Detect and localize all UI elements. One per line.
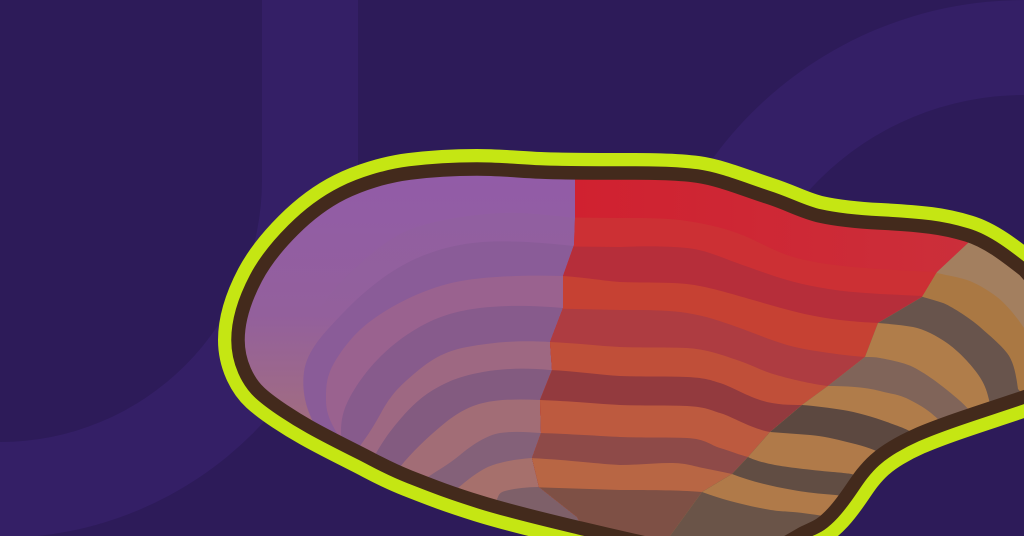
background shape: arc at top right: [639, 0, 1024, 385]
background shape: large U curve: [0, 0, 358, 536]
lime outer outline: [238, 169, 1024, 536]
purple strata section: [244, 176, 579, 521]
brown strata section: [670, 242, 1024, 536]
dark brown inner outline: [238, 169, 1024, 536]
layered fill clipped to the outline: [244, 176, 1024, 536]
red strata section: [532, 180, 968, 536]
